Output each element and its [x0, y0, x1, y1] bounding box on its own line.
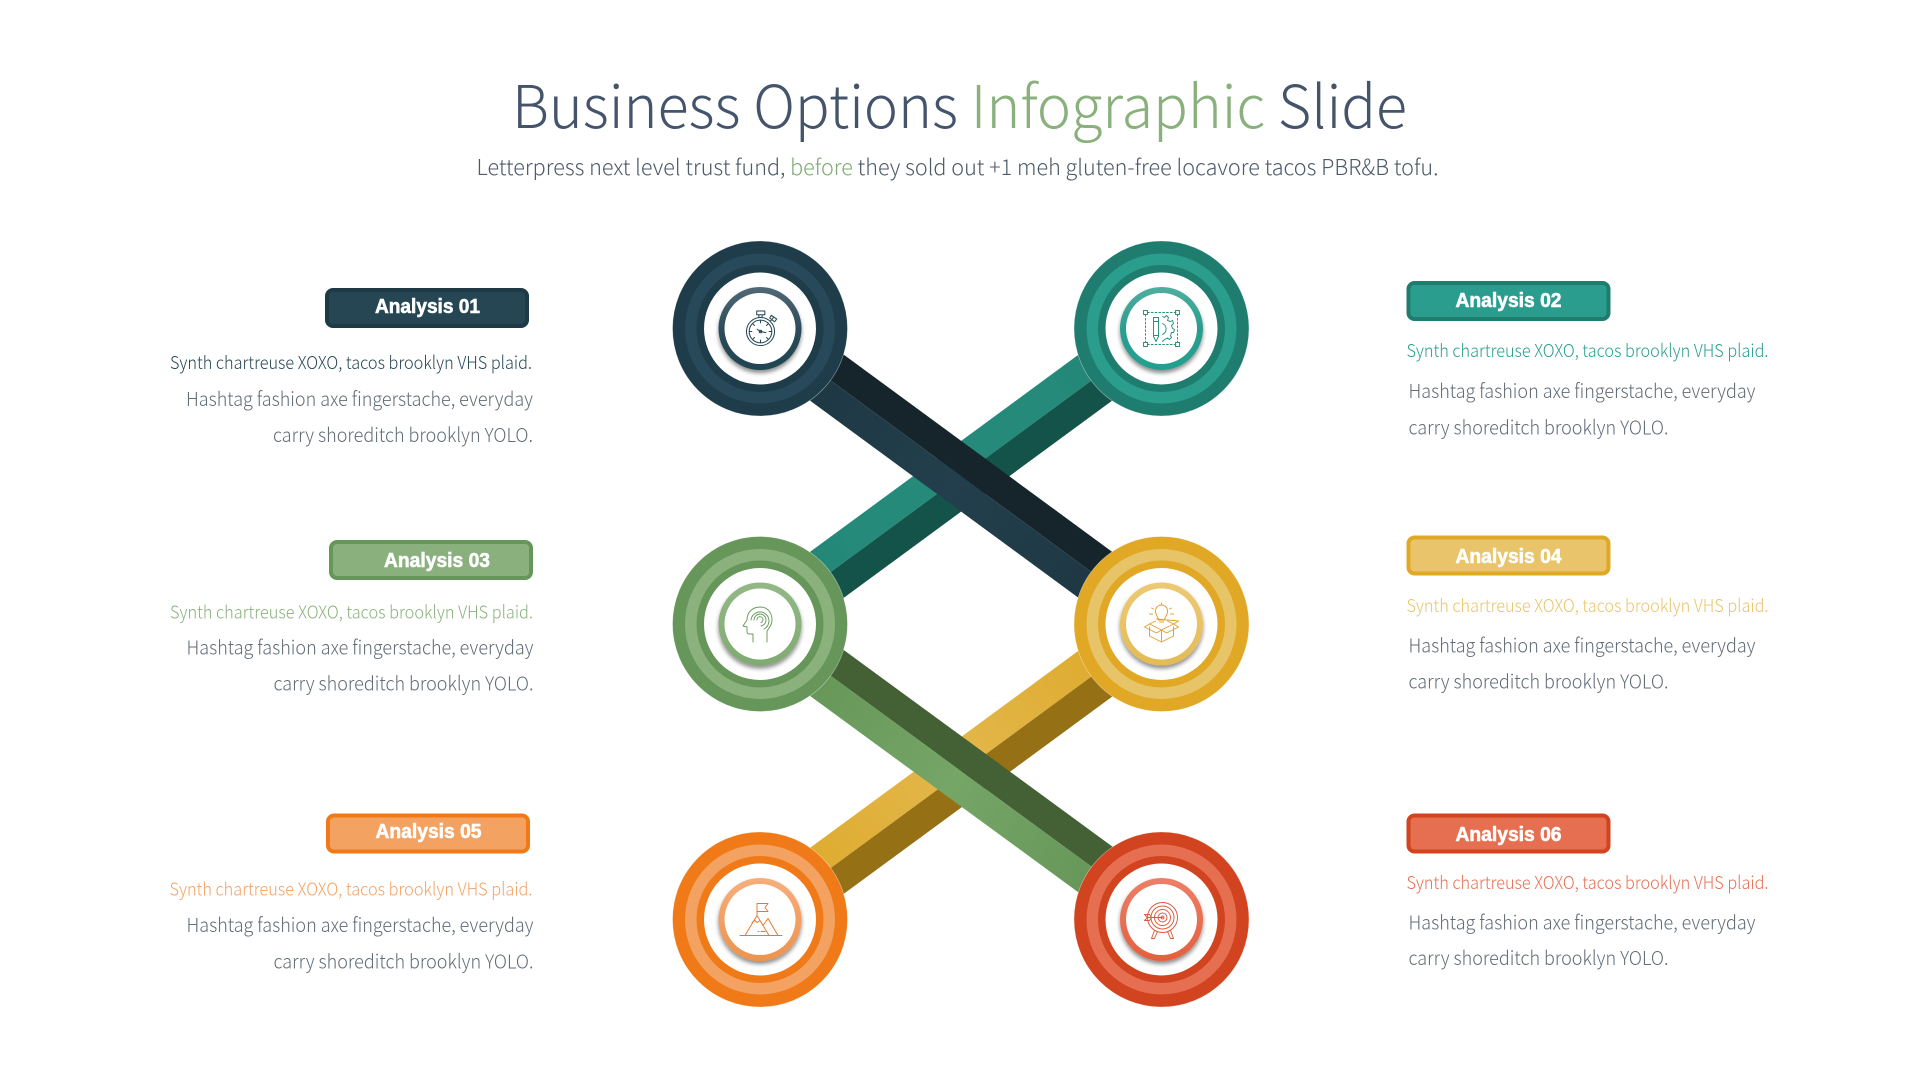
text block: Analysis 01 — [170, 290, 533, 448]
node: Analysis 04 circle with box and bulb icon — [1074, 536, 1249, 712]
label badge: Analysis 04: Analysis 04 — [1456, 546, 1562, 568]
node: Analysis 01 circle with stopwatch icon — [672, 241, 848, 416]
icon: archery target — [1144, 902, 1178, 938]
body line 1: Hashtag fashion axe fingerstache, everyday — [1408, 375, 1756, 404]
body line 2: carry shoreditch brooklyn YOLO. — [274, 668, 534, 696]
body line 1: Hashtag fashion axe fingerstache, everyday — [1408, 630, 1756, 658]
body line 2: carry shoreditch brooklyn YOLO. — [1408, 942, 1668, 971]
text block: Analysis 03 — [170, 542, 534, 696]
text block: Analysis 02 — [1406, 283, 1768, 440]
icon: open box with light bulb — [1144, 603, 1178, 642]
label badge: Analysis 02: Analysis 02 — [1456, 290, 1562, 312]
node: Analysis 06 circle with target icon — [1074, 832, 1249, 1007]
icon: pencil and gear in selection frame — [1144, 310, 1180, 346]
body line 2: carry shoreditch brooklyn YOLO. — [273, 419, 533, 448]
label badge: Analysis 06 — [1408, 816, 1608, 852]
connector: gold bar from Analysis 05 to Analysis 04 — [743, 602, 1179, 943]
highlighted line: Synth chartreuse XOXO, tacos brooklyn VHS plaid. — [1406, 869, 1768, 895]
text block: Analysis 04 — [1406, 538, 1768, 694]
highlighted line: Synth chartreuse XOXO, tacos brooklyn VHS plaid. — [1406, 337, 1768, 363]
highlighted line: Synth chartreuse XOXO, tacos brooklyn VHS plaid. — [170, 349, 532, 375]
connector: navy bar from Analysis 01 to Analysis 04 — [743, 306, 1179, 647]
label badge: Analysis 01: Analysis 01 — [375, 296, 480, 318]
body line 2: carry shoreditch brooklyn YOLO. — [1408, 666, 1668, 694]
subtitle: Letterpress next level trust fund, before they sold out +1 meh gluten-free locavore tacos PBR&B tofu. — [476, 150, 1438, 182]
label badge: Analysis 06: Analysis 06 — [1456, 824, 1562, 846]
label badge: Analysis 05: Analysis 05 — [376, 821, 482, 843]
icon: head with maze — [743, 607, 772, 642]
highlighted line: Synth chartreuse XOXO, tacos brooklyn VHS plaid. — [170, 876, 532, 902]
label badge: Analysis 03 — [331, 542, 531, 578]
label badge: Analysis 01 — [327, 290, 527, 326]
body line 1: Hashtag fashion axe fingerstache, everyday — [1408, 906, 1756, 936]
icon: stopwatch — [746, 311, 777, 346]
text block: Analysis 06 — [1406, 816, 1768, 971]
node: Analysis 05 circle with mountain icon — [672, 832, 848, 1007]
node: Analysis 02 circle with design icon — [1074, 241, 1249, 416]
label badge: Analysis 05 — [328, 816, 528, 852]
label badge: Analysis 04 — [1408, 538, 1608, 574]
label badge: Analysis 03: Analysis 03 — [384, 550, 490, 572]
highlighted line: Synth chartreuse XOXO, tacos brooklyn VHS plaid. — [170, 598, 533, 624]
body line 1: Hashtag fashion axe fingerstache, everyday — [186, 632, 534, 660]
text block: Analysis 05 — [170, 816, 534, 974]
body line 2: carry shoreditch brooklyn YOLO. — [274, 946, 534, 974]
title: Business Options Infographic Slide — [512, 60, 1407, 145]
connector: teal bar from Analysis 03 to Analysis 02 — [743, 306, 1179, 647]
body line 1: Hashtag fashion axe fingerstache, everyday — [186, 383, 533, 412]
body line 2: carry shoreditch brooklyn YOLO. — [1408, 412, 1668, 440]
label badge: Analysis 02 — [1408, 283, 1608, 319]
body line 1: Hashtag fashion axe fingerstache, everyday — [186, 909, 534, 938]
icon: mountain with flag — [740, 904, 782, 936]
node: Analysis 03 circle with head icon — [672, 536, 848, 712]
connector: green bar from Analysis 03 to Analysis 06 — [743, 601, 1180, 942]
highlighted line: Synth chartreuse XOXO, tacos brooklyn VHS plaid. — [1406, 592, 1768, 618]
